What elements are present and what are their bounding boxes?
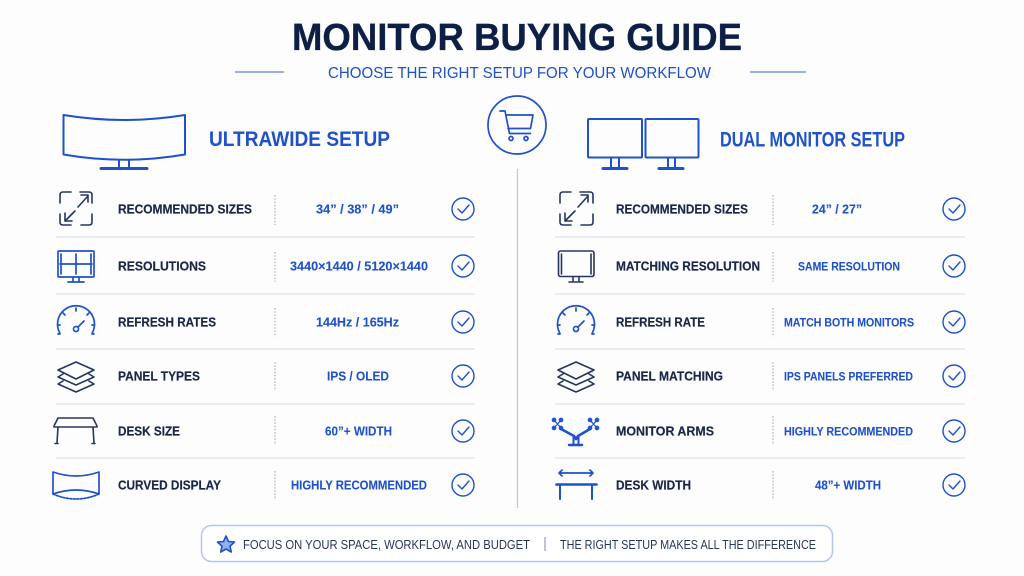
check mark [943,311,965,333]
row: desk size [54,416,474,445]
panel: dual monitor setup [552,119,965,500]
row: matching resolution: MATCHING RESOLUTION [616,260,760,274]
row: recommended sizes: 24” / 27” [812,202,862,216]
icon: monitor [558,251,594,282]
row: desk width: DESK WIDTH [616,478,691,492]
row: recommended sizes [560,192,965,225]
icon: layers [558,362,594,392]
check mark [943,198,965,220]
row: monitor arms: HIGHLY RECOMMENDED [784,426,913,438]
row: desk size: 60”+ WIDTH [325,424,392,438]
icon: shopping cart [488,96,546,154]
row: matching resolution: SAME RESOLUTION [798,262,900,274]
row: refresh rate: MATCH BOTH MONITORS [784,318,914,330]
row: resolutions: RESOLUTIONS [118,260,206,274]
check mark [943,420,965,442]
check mark [943,365,965,387]
icon: gauge [558,306,595,334]
row: refresh rates: REFRESH RATES [118,316,216,330]
callout: footer tip [202,526,832,562]
row: panel types: IPS / OLED [327,370,389,384]
row: recommended sizes: 34” / 38” / 49” [316,202,399,216]
icon: layers [58,362,94,392]
icon: desk [54,418,97,444]
row: refresh rate [558,306,965,337]
row: curved display: CURVED DISPLAY [118,478,222,492]
row: recommended sizes: RECOMMENDED SIZES [118,202,252,216]
icon: desk with width arrow [556,470,596,499]
row: desk size: DESK SIZE [118,424,180,438]
check mark [452,474,474,496]
check mark [452,365,474,387]
row: refresh rate: REFRESH RATE [616,316,705,330]
row: monitor arms [552,416,965,445]
row: panel types: PANEL TYPES [118,370,200,384]
row: curved display [53,471,474,500]
panel: ultrawide setup [53,115,475,500]
row: refresh rates [57,306,474,337]
check mark [452,198,474,220]
check mark [943,255,965,277]
callout: footer tip: FOCUS ON YOUR SPACE, WORKFLOW, AND BUDGET [243,538,530,552]
row: panel matching [558,362,965,392]
icon: ultrawide monitor [64,115,185,168]
row: resolutions: 3440×1440 / 5120×1440 [290,260,428,274]
row: desk width: 48”+ WIDTH [815,478,881,492]
icon: monitor arms [552,418,598,445]
subtitle: CHOOSE THE RIGHT SETUP FOR YOUR WORKFLOW [328,65,711,82]
icon: resize arrows [560,192,593,225]
icon: monitor grid [58,251,94,282]
icon: star [218,536,234,552]
icon: dual monitors [588,119,698,168]
row: desk width [556,470,965,500]
dual monitor heading: DUAL MONITOR SETUP [720,128,905,152]
check mark [943,474,965,496]
check mark [452,420,474,442]
row: resolutions [58,251,474,282]
row: recommended sizes [60,192,474,225]
icon: resize arrows [60,192,92,225]
row: panel types [58,362,474,392]
check mark [452,255,474,277]
row: refresh rates: 144Hz / 165Hz [316,316,399,330]
title: MONITOR BUYING GUIDE [292,17,742,59]
check mark [452,311,474,333]
row: panel matching: PANEL MATCHING [616,370,723,384]
row: recommended sizes: RECOMMENDED SIZES [616,202,748,216]
icon: gauge [57,306,95,334]
row: monitor arms: MONITOR ARMS [616,424,714,438]
row: matching resolution [558,251,965,282]
ultrawide heading: ULTRAWIDE SETUP [209,128,390,151]
icon: curved display [53,472,99,499]
row: panel matching: IPS PANELS PREFERRED [784,372,913,384]
callout: footer tip: THE RIGHT SETUP MAKES ALL THE DIFFERENCE [560,538,816,552]
row: curved display: HIGHLY RECOMMENDED [291,478,427,492]
